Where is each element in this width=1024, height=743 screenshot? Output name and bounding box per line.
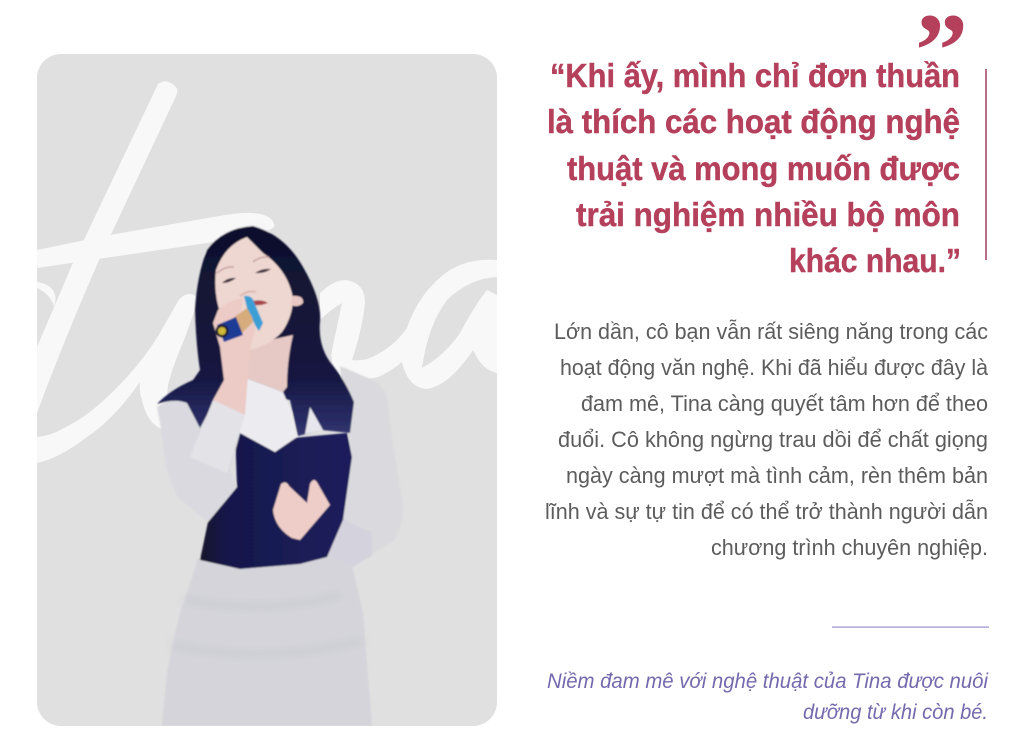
microphone foam: [244, 296, 263, 331]
left cuff: [190, 400, 245, 473]
photo caption: [547, 669, 989, 724]
microphone body: [233, 308, 254, 333]
shirt front: [238, 377, 297, 452]
panel: photo card: [37, 54, 497, 726]
photo caption: Niềm đam mê với nghệ thuật của Tina được nuôi: [547, 669, 989, 693]
pull quote heading: thuật và mong muốn được: [567, 150, 960, 187]
mouth: [253, 300, 268, 305]
eyebrows: [217, 257, 269, 273]
pull quote heading: là thích các hoạt động nghệ: [547, 103, 960, 140]
lower hand: [273, 480, 330, 540]
ear: [291, 296, 303, 306]
right sleeve: [339, 366, 370, 518]
body paragraph: đuổi. Cô không ngừng trau dồi để chất giọng: [558, 427, 988, 452]
microphone grip: [217, 317, 243, 342]
body paragraph: Lớn dần, cô bạn vẫn rất siêng năng trong các: [554, 319, 988, 344]
photo caption: dưỡng từ khi còn bé.: [803, 700, 988, 724]
body paragraph: chương trình chuyên nghiệp.: [711, 535, 988, 560]
person singing: [156, 225, 372, 726]
body paragraph: lĩnh và sự tự tin để có thể trở thành người dẫn: [545, 499, 988, 524]
pull quote heading: khác nhau.”: [789, 242, 961, 279]
pull quote heading: [547, 57, 961, 279]
body paragraph: hoạt động văn nghệ. Khi đã hiểu được đây là: [560, 355, 989, 380]
right cuff: [330, 520, 372, 565]
body paragraph: [545, 319, 989, 560]
shirt inner panel: [305, 407, 323, 434]
head halo: [204, 225, 273, 259]
neck: [243, 335, 293, 392]
skirt: [162, 550, 372, 726]
body paragraph: đam mê, Tina càng quyết tâm hơn để theo: [581, 391, 988, 416]
corset: [200, 430, 352, 569]
skirt folds: [172, 595, 362, 654]
eyes: [222, 269, 271, 283]
caption divider: [832, 626, 989, 628]
microphone end cap: [216, 324, 228, 338]
pull quote heading: trải nghiệm nhiều bộ môn: [576, 196, 960, 233]
forearm and fist: [213, 298, 255, 415]
face: [215, 237, 293, 350]
nose shadow: [240, 292, 256, 296]
script lettering: Tina: [37, 81, 497, 463]
pull quote heading: “Khi ấy, mình chỉ đơn thuần: [550, 57, 960, 94]
quote vertical rule: [985, 69, 987, 260]
body paragraph: ngày càng mượt mà tình cảm, rèn thêm bản: [566, 463, 988, 488]
hair: [157, 226, 354, 436]
left sleeve: [157, 400, 241, 523]
